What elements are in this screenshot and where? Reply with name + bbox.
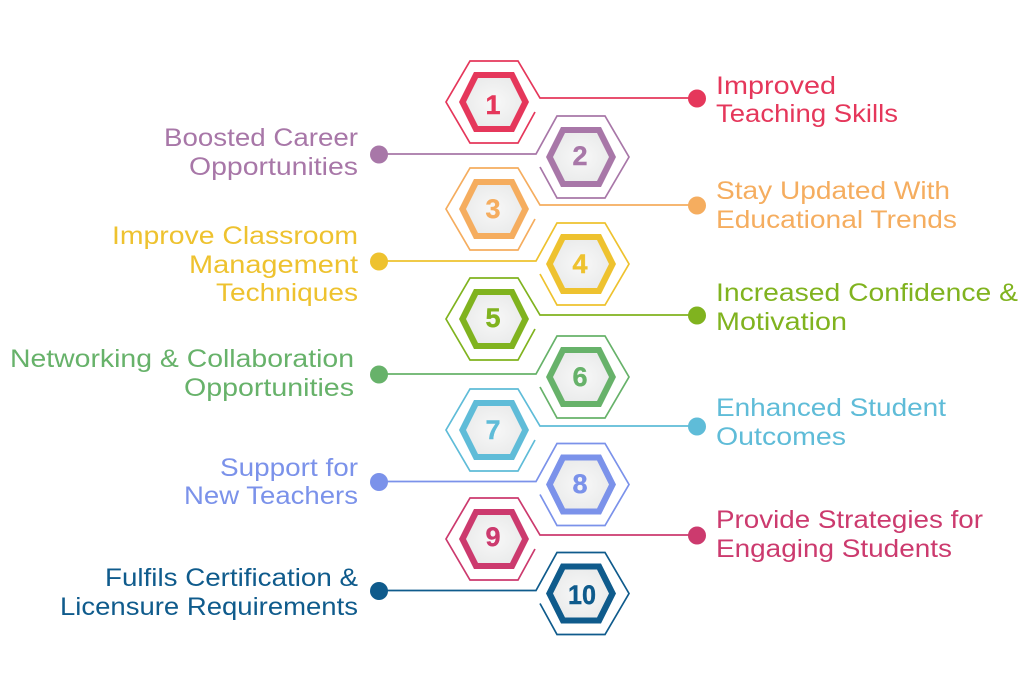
item 5: Increased Confidence & Motivation — [446, 278, 1018, 360]
item 6: Networking & Collaboration Opportunities: Opportunities — [184, 374, 354, 402]
item 2: Boosted Career Opportunities: Boosted Career — [164, 124, 358, 152]
item 5: Increased Confidence & Motivation: 5 — [485, 303, 501, 333]
item 8: Support for New Teachers — [184, 444, 629, 526]
item 10: Fulfils Certification & Licensure Requirements: Fulfils Certification & — [105, 564, 358, 592]
item 8: Support for New Teachers: New Teachers — [184, 482, 358, 510]
item 6: Networking & Collaboration Opportunities — [10, 336, 629, 418]
item 5: Increased Confidence & Motivation: Increased Confidence & — [716, 279, 1018, 307]
item 4: Improve Classroom Management Techniques: Techniques — [216, 279, 358, 307]
item 9: Provide Strategies for Engaging Students — [446, 498, 983, 580]
item 10: Fulfils Certification & Licensure Requirements — [60, 552, 629, 634]
item 7: Enhanced Student Outcomes: Outcomes — [716, 423, 846, 451]
item 3: Stay Updated With Educational Trends: Stay Updated With — [716, 177, 950, 205]
item 5: Increased Confidence & Motivation: Motivation — [716, 308, 847, 336]
item 3: Stay Updated With Educational Trends: Educational Trends — [716, 206, 957, 234]
item 1: Improved Teaching Skills — [446, 61, 898, 143]
item 8: Support for New Teachers: Support for — [220, 454, 358, 482]
item 4: Improve Classroom Management Techniques: Improve Classroom — [112, 222, 358, 250]
item 6: Networking & Collaboration Opportunities: Networking & Collaboration — [10, 345, 354, 373]
item 4: Improve Classroom Management Techniques: 4 — [572, 249, 588, 279]
item 9: Provide Strategies for Engaging Students: 9 — [485, 522, 501, 552]
item 2: Boosted Career Opportunities: 2 — [572, 141, 588, 171]
item 1: Improved Teaching Skills: Teaching Skills — [716, 100, 898, 128]
item 1: Improved Teaching Skills: 1 — [485, 90, 501, 120]
item 8: Support for New Teachers: 8 — [572, 469, 588, 499]
item 7: Enhanced Student Outcomes: 7 — [485, 415, 501, 445]
item 4: Improve Classroom Management Techniques — [112, 222, 629, 307]
item 10: Fulfils Certification & Licensure Requirements: Licensure Requirements — [60, 593, 358, 621]
item 3: Stay Updated With Educational Trends: 3 — [485, 194, 501, 224]
item 10: Fulfils Certification & Licensure Requirements: 10 — [568, 580, 596, 610]
item 3: Stay Updated With Educational Trends — [446, 168, 957, 250]
item 2: Boosted Career Opportunities: Opportunities — [189, 153, 358, 181]
item 9: Provide Strategies for Engaging Students: Provide Strategies for — [716, 506, 983, 534]
item 7: Enhanced Student Outcomes — [446, 389, 946, 471]
item 9: Provide Strategies for Engaging Students: Engaging Students — [716, 535, 952, 563]
item 1: Improved Teaching Skills: Improved — [716, 72, 836, 100]
item 6: Networking & Collaboration Opportunities: 6 — [572, 362, 588, 392]
item 7: Enhanced Student Outcomes: Enhanced Student — [716, 394, 946, 422]
item 2: Boosted Career Opportunities — [164, 116, 629, 198]
item 4: Improve Classroom Management Techniques: Management — [189, 251, 358, 279]
